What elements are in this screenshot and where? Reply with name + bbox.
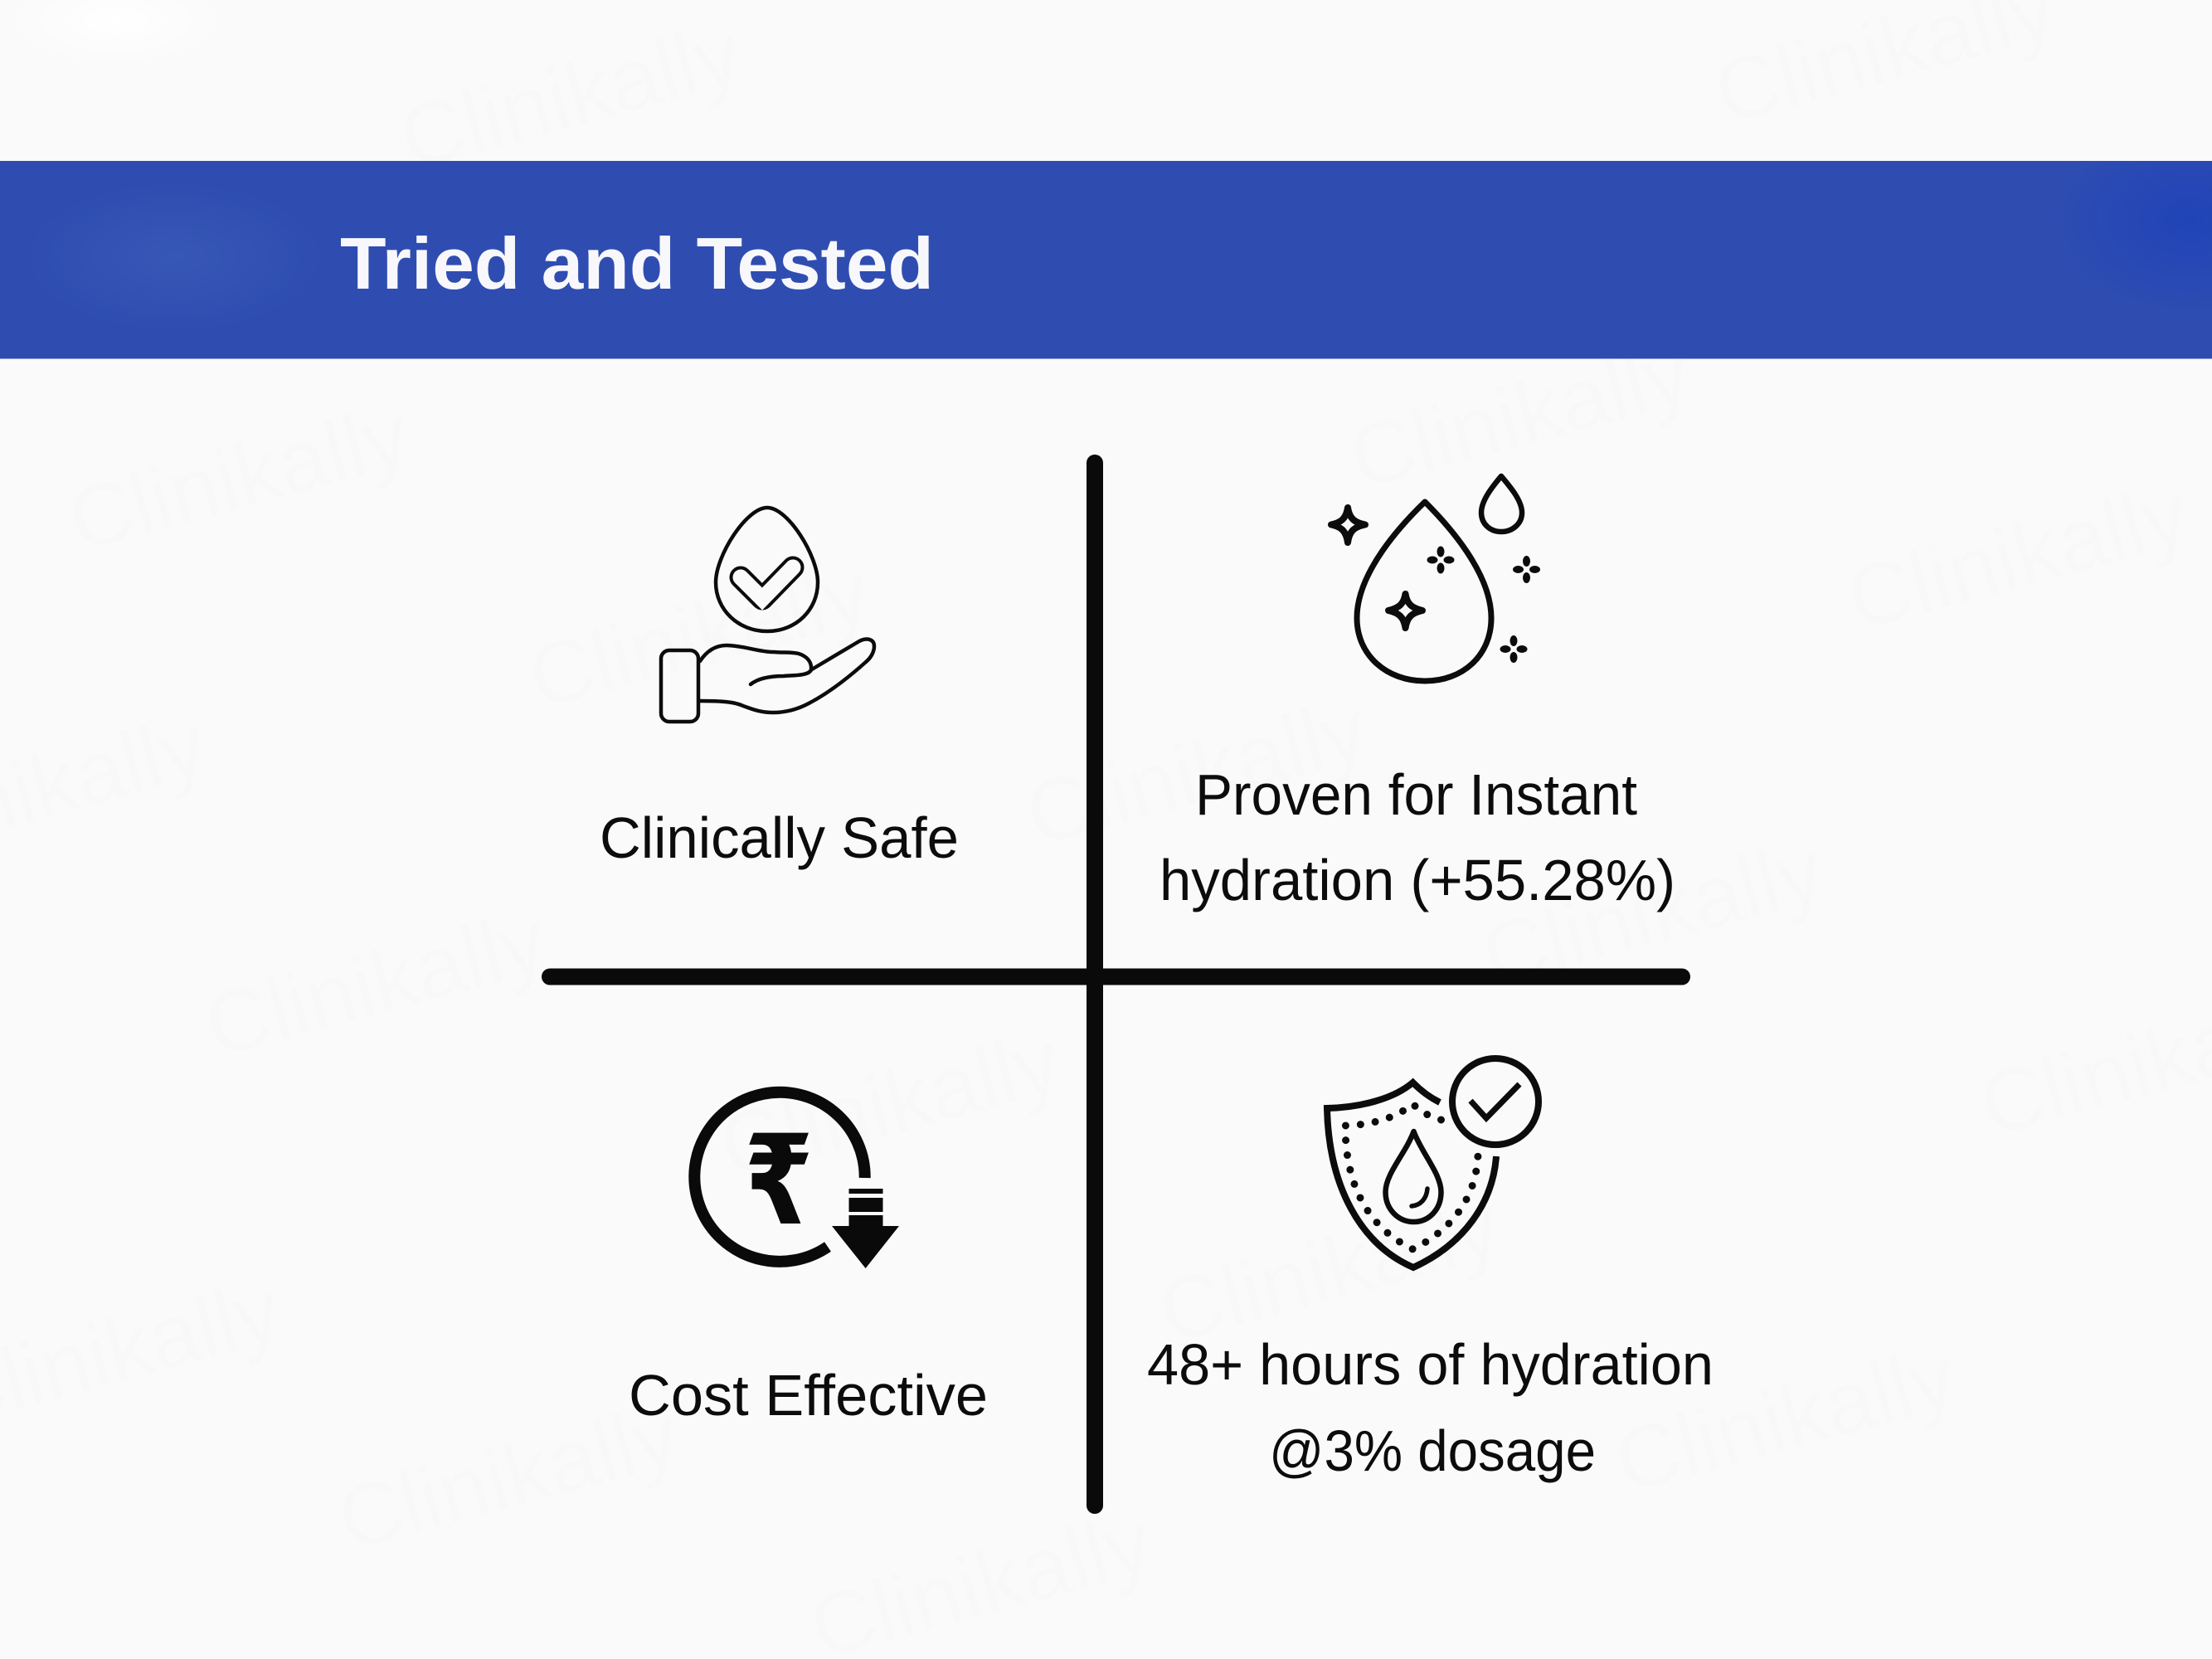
icon: shield with droplet and check badge [1327, 1058, 1539, 1267]
label: 48+ hours of hydration at 3% dosage [1147, 1332, 1714, 1483]
text: Clinikally [1472, 821, 1833, 1005]
label: Proven for Instant hydration: hydration (+55.28%) [1159, 848, 1675, 912]
text: Clinikally [1016, 680, 1377, 864]
text: Clinikally [518, 543, 879, 727]
text: Clinikally [328, 1385, 688, 1569]
text: Clinikally [1339, 324, 1700, 508]
label: Proven for Instant hydration [1159, 762, 1675, 912]
text: Clinikally [1837, 465, 2198, 649]
label: 48+ hours of hydration at 3% dosage: @3% dosage [1269, 1418, 1596, 1483]
panel: clinically safe [600, 508, 959, 870]
panel: proven instant hydration [1159, 476, 1675, 912]
label: 48+ hours of hydration at 3% dosage: 48+ hours of hydration [1147, 1332, 1714, 1397]
text: Clinikally [390, 4, 751, 188]
label: Clinically Safe: Clinically Safe [600, 805, 959, 870]
text: Clinikally [195, 892, 556, 1076]
quadrant divider cross [542, 455, 1690, 1514]
panel: cost effective [629, 1092, 988, 1428]
text: Clinikally [1149, 1178, 1510, 1362]
icon: rupee with down arrow [694, 1092, 899, 1268]
title: Tried and Tested [340, 222, 934, 304]
icon: hand holding droplet with check [661, 508, 874, 722]
icon: droplets with sparkles [1331, 476, 1540, 681]
header band [0, 161, 2212, 358]
text: Clinikally [58, 386, 419, 570]
text: Clinikally [1605, 1327, 1966, 1511]
panel: 48+ hours of hydration [1147, 1058, 1714, 1483]
label: Proven for Instant hydration: Proven for Instant [1195, 762, 1637, 827]
text: Clinikally [709, 1012, 1070, 1196]
icon: rupee with down arrow: ₹ [744, 1109, 814, 1253]
label: Cost Effective: Cost Effective [629, 1363, 988, 1428]
